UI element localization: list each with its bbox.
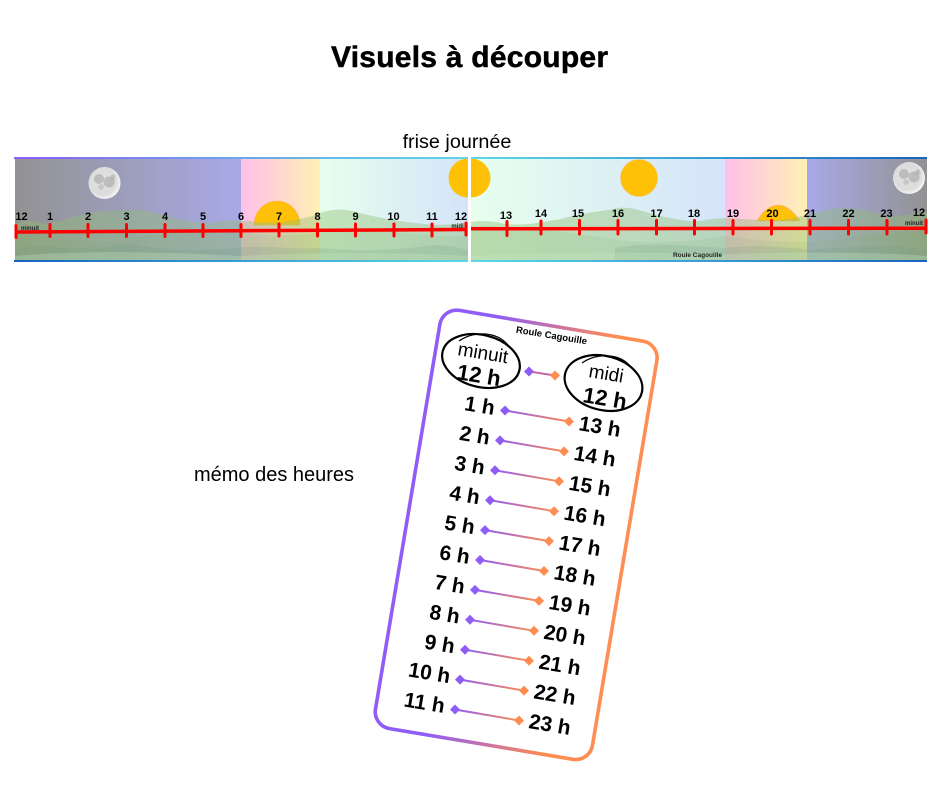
heures après-midi: minuit xyxy=(905,221,923,227)
panel: frise après-midi xyxy=(471,157,927,262)
ligne 1 h: 1 h xyxy=(463,392,496,420)
icon: lune xyxy=(88,167,120,199)
ligne 10 h: 22 h xyxy=(532,680,577,710)
heures matin: 12 xyxy=(455,211,467,223)
bordures xyxy=(471,157,927,159)
midi entouré: midi xyxy=(587,361,625,388)
icon: soleil de midi xyxy=(448,158,468,198)
ligne 2 h: 2 h xyxy=(458,422,491,450)
icon: lune xyxy=(893,162,925,194)
ligne 1 h xyxy=(463,392,622,442)
ligne 6 h: 6 h xyxy=(438,541,471,569)
heures matin: 12 xyxy=(15,211,28,223)
heures matin: 11 xyxy=(426,211,438,223)
bordures xyxy=(14,157,468,159)
ligne 4 h: 4 h xyxy=(448,482,481,509)
ligne 11 h: 11 h xyxy=(402,689,446,718)
heures matin: 8 xyxy=(314,211,321,223)
heures matin: midi xyxy=(451,224,464,230)
ligne du temps matin xyxy=(16,223,466,238)
paysage de collines xyxy=(15,210,468,260)
ligne 5 h xyxy=(443,511,602,561)
heures matin: 7 xyxy=(276,211,282,223)
ligne 5 h: 17 h xyxy=(557,531,602,561)
heading: mémo des heures: mémo des heures xyxy=(194,464,354,486)
heading: frise journée: frise journée xyxy=(403,131,511,153)
minuit entouré xyxy=(436,326,526,396)
heures après-midi: 17 xyxy=(650,208,663,220)
séparation xyxy=(469,155,471,264)
heures après-midi: 18 xyxy=(688,208,700,220)
ligne 6 h: 18 h xyxy=(552,561,597,591)
ligne 8 h xyxy=(428,601,587,650)
heures matin: 9 xyxy=(352,211,359,223)
midi entouré: 12 h xyxy=(581,382,629,414)
heures après-midi: 19 xyxy=(727,208,739,220)
heures matin: 1 xyxy=(47,211,53,223)
ligne 3 h: 15 h xyxy=(567,472,612,501)
panel: carte mémo xyxy=(373,308,660,762)
ligne 7 h: 19 h xyxy=(547,591,592,621)
icon: soleil couchant xyxy=(757,205,800,221)
icon: soleil xyxy=(620,160,658,196)
ligne 4 h: 16 h xyxy=(562,502,607,531)
heures après-midi: 15 xyxy=(572,208,584,220)
heures matin: 3 xyxy=(123,211,130,223)
heures après-midi: 21 xyxy=(804,208,816,220)
ligne 11 h xyxy=(402,689,572,740)
paysage de collines xyxy=(471,208,927,260)
ligne 8 h: 8 h xyxy=(428,601,461,629)
minuit entouré: 12 h xyxy=(455,359,503,391)
ligne 1 h: 13 h xyxy=(577,412,622,442)
midi entouré xyxy=(559,347,648,419)
ligne 7 h xyxy=(433,571,592,621)
heures matin: 6 xyxy=(238,211,244,223)
ligne 7 h: 7 h xyxy=(433,571,466,599)
ligne du temps après-midi xyxy=(471,220,927,236)
heures matin: 5 xyxy=(200,211,206,223)
ligne 2 h: 14 h xyxy=(572,442,617,472)
minuit entouré: minuit xyxy=(456,339,510,368)
heures après-midi: 23 xyxy=(880,208,893,220)
cadre de carte xyxy=(373,308,660,762)
ligne 5 h: 5 h xyxy=(443,511,476,539)
icon: soleil levant xyxy=(254,201,300,225)
ligne 2 h xyxy=(458,422,617,472)
heures après-midi: Roule Cagouille xyxy=(673,252,722,259)
ligne 6 h xyxy=(438,541,597,591)
lignes d'heures xyxy=(402,392,622,740)
heures matin: 2 xyxy=(85,211,91,223)
heures après-midi: 16 xyxy=(612,208,624,220)
heures après-midi xyxy=(500,207,925,259)
ligne 3 h xyxy=(453,452,612,501)
ligne 10 h xyxy=(407,659,577,710)
icon: soleil de midi, suite xyxy=(471,158,490,198)
ligne 11 h: 23 h xyxy=(527,710,572,740)
ligne 9 h: 21 h xyxy=(537,651,582,680)
heures après-midi: 14 xyxy=(535,208,548,220)
ligne 10 h: 10 h xyxy=(407,659,452,688)
heures après-midi: 22 xyxy=(842,208,855,220)
heures matin: 10 xyxy=(387,211,400,223)
heures après-midi: 20 xyxy=(766,208,779,220)
heures matin: 4 xyxy=(162,211,169,223)
ligne 9 h: 9 h xyxy=(423,631,456,658)
title: Visuels à découper xyxy=(331,41,608,74)
heures après-midi: 12 xyxy=(913,207,925,219)
heures matin: minuit xyxy=(21,226,39,232)
heures après-midi: 13 xyxy=(500,210,512,222)
titre de carte: Roule Cagouille xyxy=(515,325,588,347)
panel: frise matin xyxy=(14,157,468,262)
heures matin xyxy=(15,211,467,232)
ligne 4 h xyxy=(448,482,607,531)
ligne 8 h: 20 h xyxy=(542,621,587,650)
connecteur 12 h xyxy=(524,366,560,380)
ligne 9 h xyxy=(423,631,582,680)
ligne 3 h: 3 h xyxy=(453,452,486,480)
